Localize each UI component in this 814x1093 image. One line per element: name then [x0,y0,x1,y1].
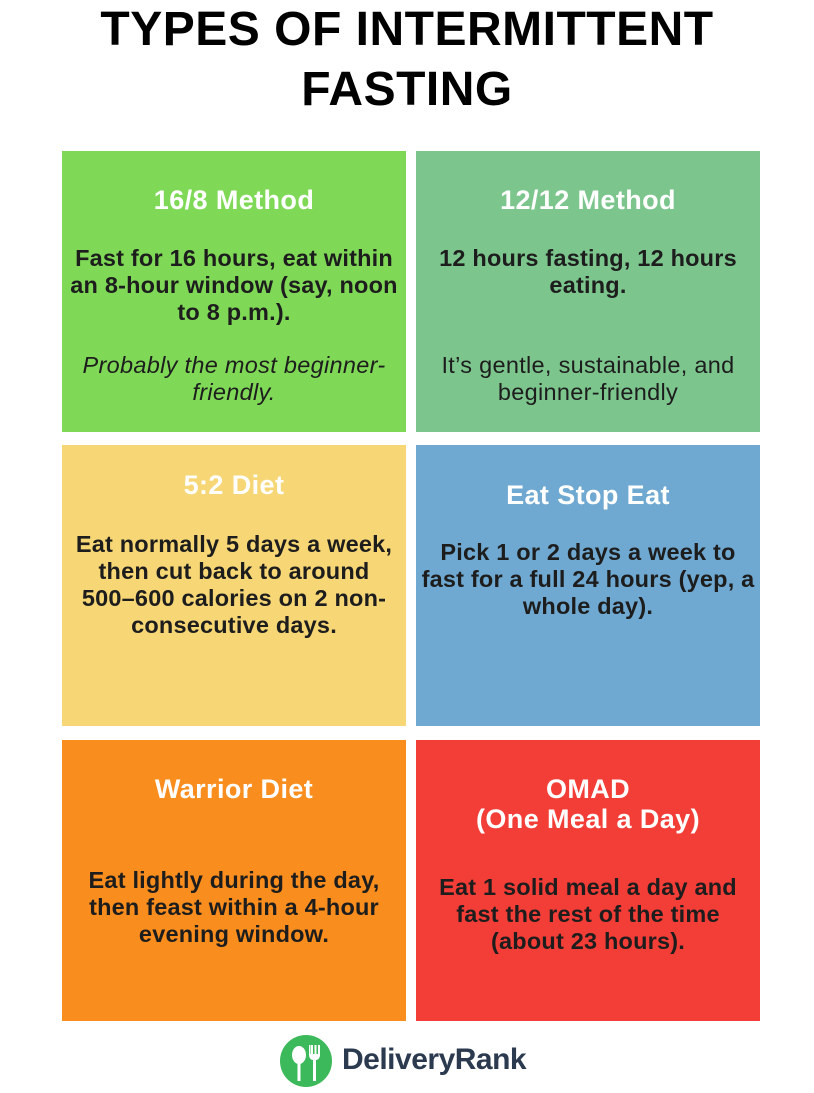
panel: OMAD [416,740,760,1021]
text: warrior body [89,867,379,947]
text: OMAD body: (about 23 hours). [491,928,685,954]
text: eat stop eat body: whole day). [523,593,653,619]
icon: spoon and fork [280,1035,332,1087]
text: 12/12 body: eating. [549,272,627,298]
panel: eat stop eat [416,445,760,726]
heading: 12/12: 12/12 Method [500,185,676,215]
panel: 5:2 diet [62,445,406,726]
text: 16/8 body: an 8-hour window (say, noon [70,272,398,298]
text: OMAD body [439,874,737,954]
text: 5:2 body: Eat normally 5 days a week, [76,531,392,557]
text: 12/12 note: It’s gentle, sustainable, and [441,352,735,378]
text: 16/8 body: to 8 p.m.). [177,299,291,325]
panel: 16/8 method [62,151,406,432]
text: eat stop eat body [422,539,754,619]
text: 12/12 body [439,245,737,298]
heading: eat stop eat: Eat Stop Eat [506,480,670,510]
text: 12/12 note [441,352,735,405]
logo [280,1035,526,1087]
text: 16/8 body: Fast for 16 hours, eat within [75,245,393,271]
text: 5:2 body [76,531,392,638]
text: warrior body: Eat lightly during the day, [89,867,379,893]
title [100,3,714,116]
text: 5:2 body: 500–600 calories on 2 non- [82,585,386,611]
text: OMAD body: fast the rest of the time [456,901,720,927]
text: OMAD body: Eat 1 solid meal a day and [439,874,737,900]
title: TYPES OF INTERMITTENT [100,3,714,56]
title: FASTING [301,63,513,116]
heading: 16/8: 16/8 Method [154,185,314,215]
heading: OMAD [476,774,700,834]
heading: OMAD: (One Meal a Day) [476,804,700,834]
heading: OMAD: OMAD [546,774,630,804]
text: 5:2 body: consecutive days. [131,612,337,638]
text: 16/8 body [70,245,398,325]
panel: warrior diet [62,740,406,1021]
text: 16/8 note [83,352,385,405]
text: 12/12 body: 12 hours fasting, 12 hours [439,245,737,271]
text: eat stop eat body: fast for a full 24 hours (yep, a [422,566,754,592]
text: brand name: DeliveryRank [342,1043,526,1076]
text: warrior body: then feast within a 4-hour [89,894,379,920]
text: 16/8 note: Probably the most beginner- [83,352,385,378]
text: 12/12 note: beginner-friendly [498,379,678,405]
text: eat stop eat body: Pick 1 or 2 days a week to [440,539,736,565]
text: 16/8 note: friendly. [192,379,276,405]
text: warrior body: evening window. [139,921,329,947]
heading: 5:2: 5:2 Diet [184,470,284,500]
heading: warrior: Warrior Diet [155,774,313,804]
panel: 12/12 method [416,151,760,432]
text: 5:2 body: then cut back to around [99,558,369,584]
